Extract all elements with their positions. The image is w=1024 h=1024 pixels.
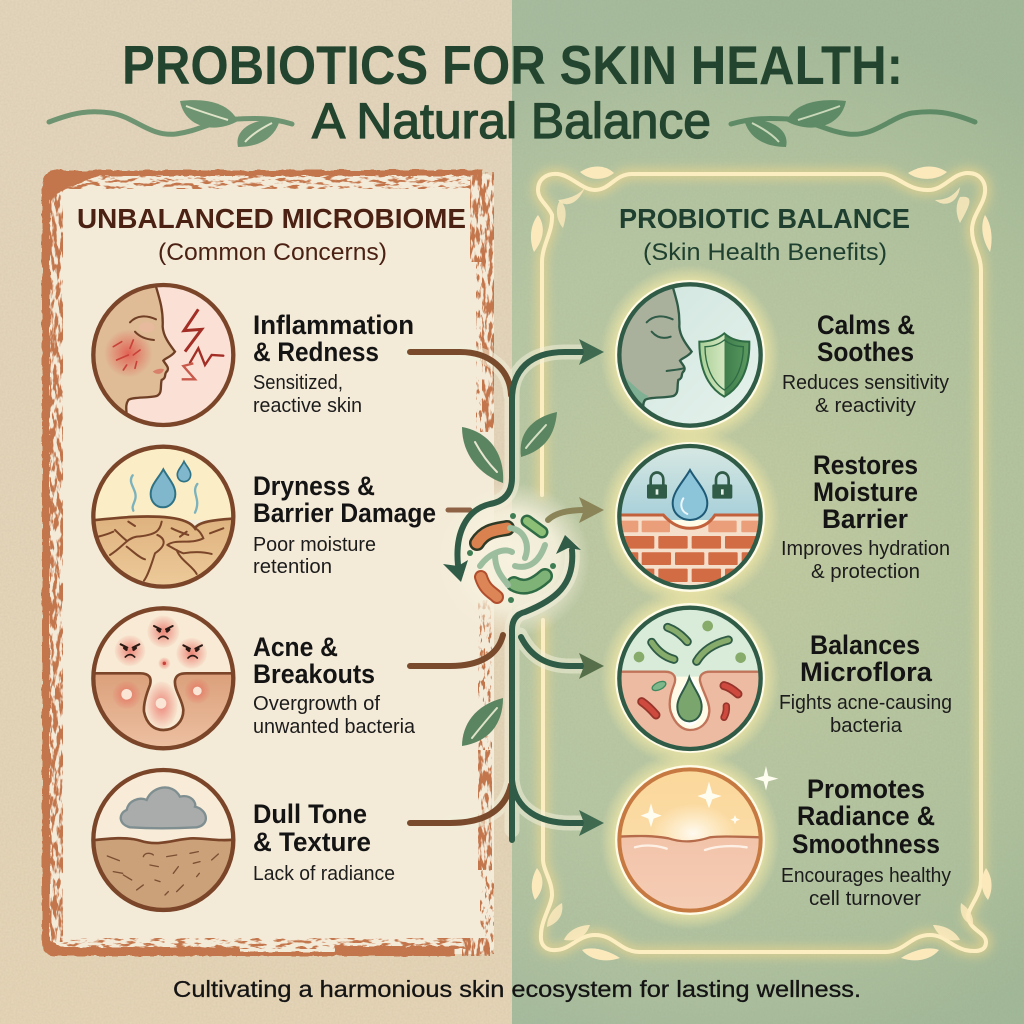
label: dryness: Barrier Damage bbox=[253, 498, 436, 528]
label: dull tone: & Texture bbox=[253, 827, 371, 857]
leaf: upper right bbox=[521, 412, 557, 457]
icon: balanced microflora bbox=[617, 603, 763, 753]
panel paper bbox=[46, 174, 494, 954]
leaf: lower bbox=[462, 698, 503, 746]
label: promotes: Promotes bbox=[807, 774, 925, 804]
left vine flourish bbox=[49, 100, 292, 147]
label: inflammation: Inflammation bbox=[253, 310, 414, 340]
label: acne: Breakouts bbox=[253, 659, 375, 689]
label: calms bbox=[782, 310, 949, 417]
swirl glow bbox=[434, 482, 590, 638]
brown arrow lines bbox=[410, 352, 511, 823]
icon: moisture barrier bricks bbox=[617, 443, 763, 590]
background: right sage half bbox=[512, 0, 1024, 1024]
label: dull tone: Lack of radiance bbox=[253, 863, 395, 885]
label: calms: & reactivity bbox=[815, 395, 916, 417]
title line 2: A Natural Balance bbox=[312, 93, 711, 149]
panel heading: PROBIOTIC BALANCE bbox=[619, 203, 910, 234]
label: inflammation: & Redness bbox=[253, 337, 379, 367]
label: inflammation: reactive skin bbox=[253, 395, 362, 417]
label: dryness bbox=[253, 471, 436, 578]
label: balances: Microflora bbox=[800, 657, 933, 687]
right vine flourish bbox=[731, 100, 975, 147]
icon: dry cracked skin bbox=[90, 443, 237, 590]
panel heading: UNBALANCED MICROBIOME bbox=[77, 203, 466, 234]
icon glows bbox=[600, 265, 780, 930]
label: promotes: Encourages healthy bbox=[781, 865, 951, 887]
panel: unbalanced microbiome bbox=[42, 170, 494, 956]
label: acne: Acne & bbox=[253, 632, 338, 662]
label: dryness: Dryness & bbox=[253, 471, 375, 501]
label: calms: Calms & bbox=[817, 310, 915, 340]
background: left parchment half bbox=[0, 0, 512, 1024]
label: restores: Barrier bbox=[822, 504, 908, 534]
central flow diagram bbox=[410, 339, 604, 840]
icon: radiant skin bbox=[617, 766, 778, 913]
label: balances: Balances bbox=[810, 630, 920, 660]
label: acne: unwanted bacteria bbox=[253, 716, 416, 738]
label: promotes: cell turnover bbox=[809, 888, 921, 910]
locks bbox=[647, 472, 732, 499]
label: inflammation: Sensitized, bbox=[253, 372, 343, 394]
label: restores: Improves hydration bbox=[781, 538, 950, 560]
label: promotes: Radiance & bbox=[797, 801, 935, 831]
panel heading bbox=[619, 203, 910, 266]
panel heading: (Skin Health Benefits) bbox=[643, 239, 887, 266]
label: balances: Fights acne-causing bbox=[779, 692, 952, 714]
panel: probiotic balance bbox=[531, 166, 992, 960]
panel heading: (Common Concerns) bbox=[158, 239, 387, 266]
label: promotes: Smoothness bbox=[792, 829, 940, 859]
title bbox=[122, 34, 903, 149]
green arrows bbox=[457, 352, 585, 840]
bacteria swirl bbox=[467, 513, 556, 603]
label: dryness: Poor moisture bbox=[253, 534, 376, 556]
label: acne bbox=[253, 632, 416, 738]
label: dryness: retention bbox=[253, 556, 332, 578]
label: inflammation bbox=[253, 310, 414, 417]
label: acne: Overgrowth of bbox=[253, 693, 380, 715]
glowing frame bbox=[531, 166, 992, 960]
label: promotes bbox=[781, 774, 951, 910]
arrowheads bbox=[443, 339, 604, 836]
label: restores: Moisture bbox=[813, 477, 918, 507]
rough terracotta border bbox=[42, 170, 494, 956]
arrow halos bbox=[410, 352, 585, 830]
icon: acne pores bbox=[90, 603, 237, 753]
label: dull tone bbox=[253, 799, 395, 885]
panel heading bbox=[77, 203, 466, 266]
footer tagline: Cultivating a harmonious skin ecosystem for lasting wellness. bbox=[173, 976, 861, 1002]
icon: calm face with shield bbox=[610, 283, 763, 430]
title line 1: PROBIOTICS FOR SKIN HEALTH: bbox=[122, 34, 903, 96]
label: restores: Restores bbox=[813, 450, 918, 480]
label: restores: & protection bbox=[811, 561, 920, 583]
faded middle arrow bbox=[548, 510, 585, 520]
leaf: upper left bbox=[462, 427, 503, 483]
label: calms: Reduces sensitivity bbox=[782, 372, 949, 394]
label: restores bbox=[781, 450, 950, 583]
icon: dull skin with cloud bbox=[90, 767, 237, 913]
label: calms: Soothes bbox=[817, 337, 914, 367]
label: balances: bacteria bbox=[830, 715, 903, 737]
label: balances bbox=[779, 630, 952, 737]
icon: inflamed face bbox=[80, 283, 237, 430]
label: dull tone: Dull Tone bbox=[253, 799, 367, 829]
